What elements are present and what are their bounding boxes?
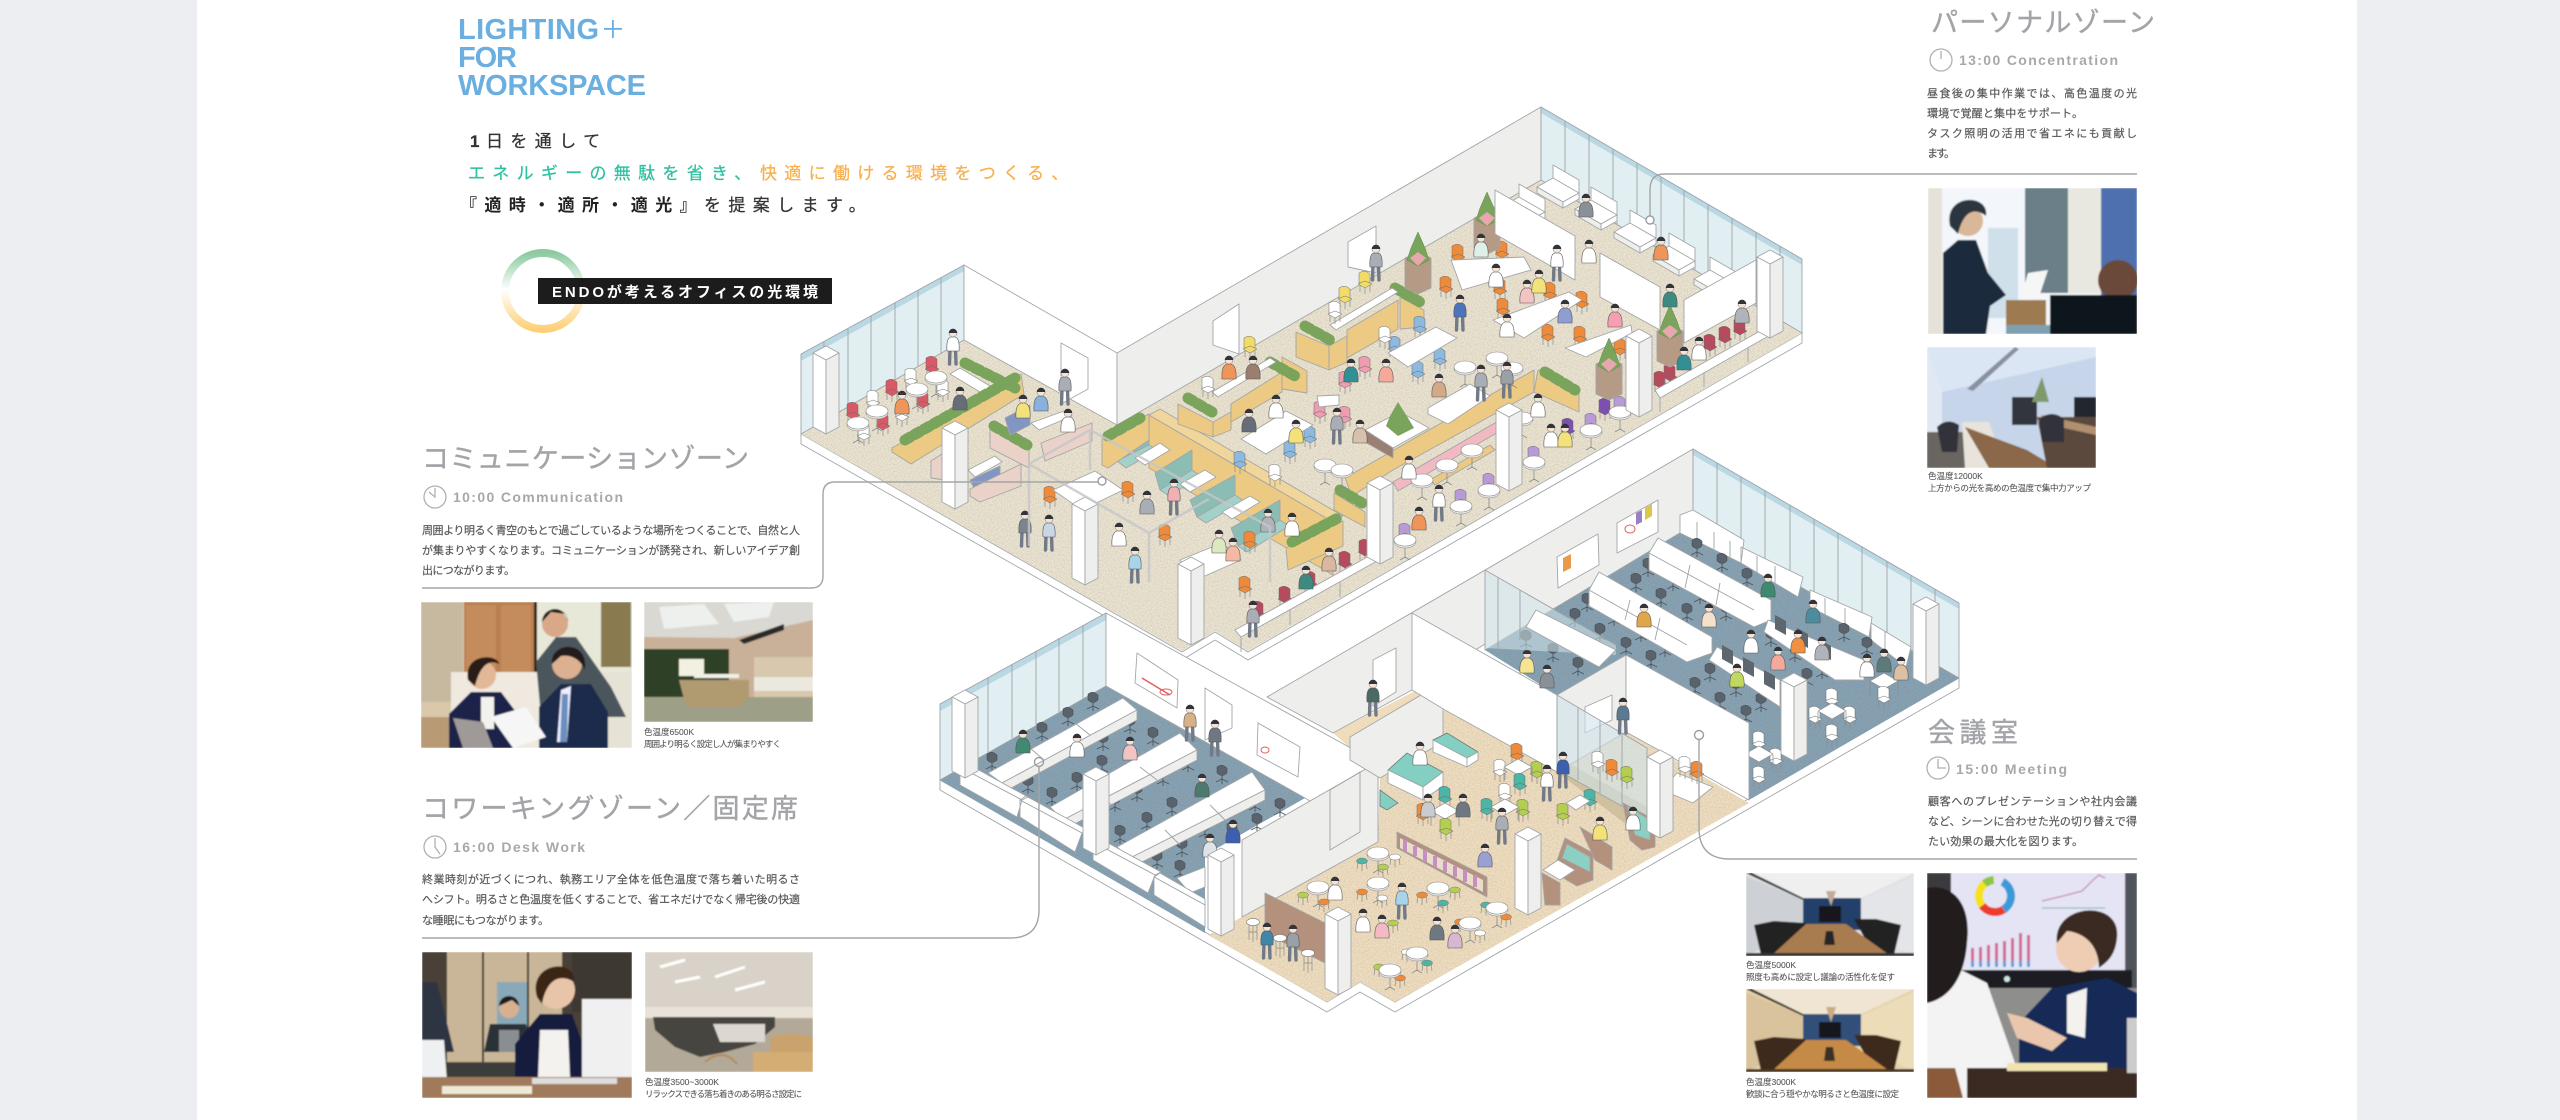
glass wall lower left bbox=[940, 613, 1106, 780]
photo caption bbox=[644, 727, 781, 749]
columns lower floor bbox=[1325, 597, 1939, 995]
sofa cushions bbox=[1428, 384, 1490, 424]
floor: open office blue bbox=[1485, 525, 1959, 800]
body text: タスク照明の活用で省エネにも貢献し bbox=[1927, 126, 2137, 140]
booths teal bbox=[1542, 803, 1655, 905]
body text bbox=[1927, 86, 2137, 160]
lounge tables and chairs bbox=[1416, 743, 1597, 841]
lounge booths bbox=[931, 405, 1092, 502]
front cabinets lower left bbox=[960, 763, 1205, 927]
people upper floor bbox=[895, 194, 1749, 636]
floor bbox=[801, 180, 1802, 651]
floor plan: lower floor bbox=[940, 449, 1959, 1012]
panel: personal zone bbox=[1927, 8, 2155, 493]
lower orange bench with pink seat bbox=[1334, 370, 1579, 527]
caption 3000K bbox=[1746, 1077, 1899, 1099]
back wall lower with door bbox=[1267, 449, 1693, 733]
meeting room glass bbox=[1557, 695, 1713, 840]
tagline: を提案します。 bbox=[704, 196, 873, 215]
tree planters bbox=[1405, 192, 1683, 400]
teal benches lounge bbox=[1380, 733, 1478, 810]
photo caption: 色温度6500K bbox=[644, 727, 694, 737]
body text bbox=[422, 872, 800, 927]
caption 3000K: 色温度3000K bbox=[1746, 1077, 1796, 1087]
panel: meeting room bbox=[1746, 718, 2137, 1099]
lounge planter bbox=[892, 363, 1024, 464]
body text: 環境で覚醒と集中をサポート。 bbox=[1927, 106, 2083, 120]
brown partition bbox=[1265, 893, 1325, 963]
time label: 13:00 Concentration bbox=[1959, 52, 2118, 68]
body text bbox=[1928, 794, 2137, 848]
photo: presentation discussion bbox=[1927, 873, 2137, 1098]
personal zone booths bbox=[1503, 165, 1736, 300]
floor plan: upper floor bbox=[801, 107, 1802, 660]
caption 5000K: 色温度5000K bbox=[1746, 960, 1796, 970]
photo caption: 色温度12000K bbox=[1928, 471, 1983, 481]
connector lines bbox=[422, 174, 2137, 938]
photo: green wall lounge bbox=[644, 602, 813, 722]
panel: communication zone bbox=[421, 444, 813, 749]
front wall lower mid bbox=[1242, 762, 1378, 917]
columns lower left bbox=[952, 690, 1234, 936]
photo: meeting room 5000K bbox=[1746, 873, 1914, 956]
photo caption: リラックスできる落ち着きのある明るさ設定に bbox=[645, 1089, 802, 1099]
corridor bbox=[1333, 690, 1443, 752]
people open office bbox=[1520, 574, 1908, 688]
desk chairs open office bbox=[1520, 538, 1873, 724]
photo: woman at desk bbox=[422, 952, 632, 1098]
glass wall open office bbox=[1693, 449, 1959, 678]
heading: パーソナルゾーン bbox=[1931, 8, 2155, 38]
wall with whiteboards lower left bbox=[1106, 613, 1378, 842]
caption 3000K: 歓談に合う穏やかな明るさと色温度に設定 bbox=[1746, 1089, 1899, 1099]
body text: 終業時刻が近づくにつれ、執務エリア全体を低色温度で落ち着いた明るさ bbox=[422, 872, 800, 886]
photo caption bbox=[645, 1077, 802, 1099]
title: Lighting+ for Workspace: FOR bbox=[458, 42, 517, 74]
white partitions bbox=[1495, 190, 1756, 343]
body text bbox=[422, 523, 800, 577]
heading: コミュニケーションゾーン bbox=[422, 444, 749, 474]
desk chairs lower left bbox=[986, 692, 1286, 879]
body text: な睡眠にもつながります。 bbox=[422, 913, 549, 927]
desk rows open office bbox=[1589, 538, 1864, 707]
floor: lounge beige bbox=[1208, 710, 1749, 1002]
tagline: 1 bbox=[470, 132, 487, 151]
columns upper floor bbox=[813, 250, 1783, 645]
lower slab bbox=[940, 678, 1959, 1012]
people lower left bbox=[1016, 705, 1240, 857]
photo: three colleagues talking bbox=[421, 602, 632, 748]
chairs upper floor bbox=[846, 241, 1747, 624]
white work tables bbox=[1053, 257, 1632, 579]
glass wall right bbox=[1541, 107, 1802, 333]
floor: desk work blue bbox=[940, 686, 1305, 933]
clock icon 16:00 bbox=[424, 836, 446, 858]
body text: など、シーンに合わせた光の切り替えで得 bbox=[1928, 814, 2137, 828]
body text: ます。 bbox=[1927, 147, 1955, 160]
photo: woman at standing desk bbox=[1928, 188, 2137, 334]
tagline: 快適に働ける環境をつくる、 bbox=[760, 164, 1076, 183]
counters bbox=[1235, 322, 1779, 652]
tagline: 日を通して bbox=[486, 132, 608, 151]
clock icon 10:00 bbox=[424, 486, 446, 508]
caption 5000K bbox=[1746, 960, 1895, 982]
body text: 顧客へのプレゼンテーションや社内会議 bbox=[1928, 794, 2137, 808]
body text: たい効果の最大化を図ります。 bbox=[1928, 834, 2083, 848]
meeting tables open office bbox=[1745, 673, 1898, 789]
photo caption bbox=[1928, 471, 2091, 493]
tagline bbox=[460, 132, 1076, 215]
title: Lighting+ for Workspace: LIGHTING bbox=[458, 14, 599, 46]
stools and round tables lounge bbox=[1246, 847, 1512, 990]
photo: task-lit booth row bbox=[1927, 347, 2096, 468]
desk rows lower left bbox=[988, 698, 1265, 893]
ring and label: ENDO light environment: ENDOが考えるオフィスの光環境 bbox=[552, 283, 818, 301]
round tables upper floor bbox=[847, 352, 1631, 560]
bookshelf bbox=[1397, 832, 1487, 897]
photo caption: 周囲より明るく設定し人が集まりやすく bbox=[644, 739, 781, 749]
cabinets open office bbox=[1680, 510, 1911, 667]
heading: コワーキングゾーン／固定席 bbox=[422, 794, 798, 824]
ring and label: ENDO light environment bbox=[505, 253, 832, 329]
people lounge bbox=[1261, 680, 1640, 960]
time label: 15:00 Meeting bbox=[1956, 761, 2067, 777]
photo caption: 色温度3500~3000K bbox=[645, 1077, 719, 1087]
slab bbox=[801, 333, 1802, 660]
back walls bbox=[964, 265, 1117, 425]
body text: 出につながります。 bbox=[422, 563, 515, 577]
title: Lighting+ for Workspace: WORKSPACE bbox=[458, 70, 646, 102]
gray wall and white wall at meeting room bbox=[1557, 655, 1749, 800]
title: Lighting+ for Workspace bbox=[458, 14, 646, 102]
photo caption: 上方からの光を高めの色温度で集中力アップ bbox=[1928, 483, 2091, 493]
partition and white wall lounge bbox=[1350, 613, 1557, 778]
time label: 10:00 Communication bbox=[453, 489, 623, 505]
heading: 会議室 bbox=[1928, 718, 2018, 748]
long orange bench with teal booths bbox=[1102, 409, 1343, 575]
body text: 周囲より明るく青空のもとで過ごしているような場所をつくることで、自然と人 bbox=[422, 523, 800, 537]
doors bbox=[1061, 226, 1376, 404]
glass wall left bbox=[801, 265, 964, 434]
clock icon 15:00 bbox=[1927, 757, 1949, 779]
photo: meeting room 3000K bbox=[1746, 989, 1914, 1072]
body text: が集まりやすくなります。コミュニケーションが誘発され、新しいアイデア創 bbox=[422, 543, 800, 557]
photo: warm office bbox=[645, 952, 813, 1072]
ceiling light frame bbox=[1029, 430, 1270, 582]
panel: coworking zone bbox=[422, 794, 813, 1099]
body text: へシフト。明るさと色温度を低くすることで、省エネだけでなく帰宅後の快適 bbox=[422, 892, 800, 906]
tagline: エネルギーの無駄を省き、 bbox=[468, 164, 758, 183]
time label: 16:00 Desk Work bbox=[453, 839, 585, 855]
upper orange benches bbox=[1178, 288, 1424, 437]
tagline: 『適時・適所・適光』 bbox=[460, 196, 704, 215]
clock icon 13:00 bbox=[1930, 49, 1952, 71]
small glass room open office bbox=[1485, 570, 1616, 667]
caption 5000K: 照度も高めに設定し議論の活性化を促す bbox=[1746, 972, 1895, 982]
body text: 昼食後の集中作業では、高色温度の光 bbox=[1927, 86, 2137, 100]
